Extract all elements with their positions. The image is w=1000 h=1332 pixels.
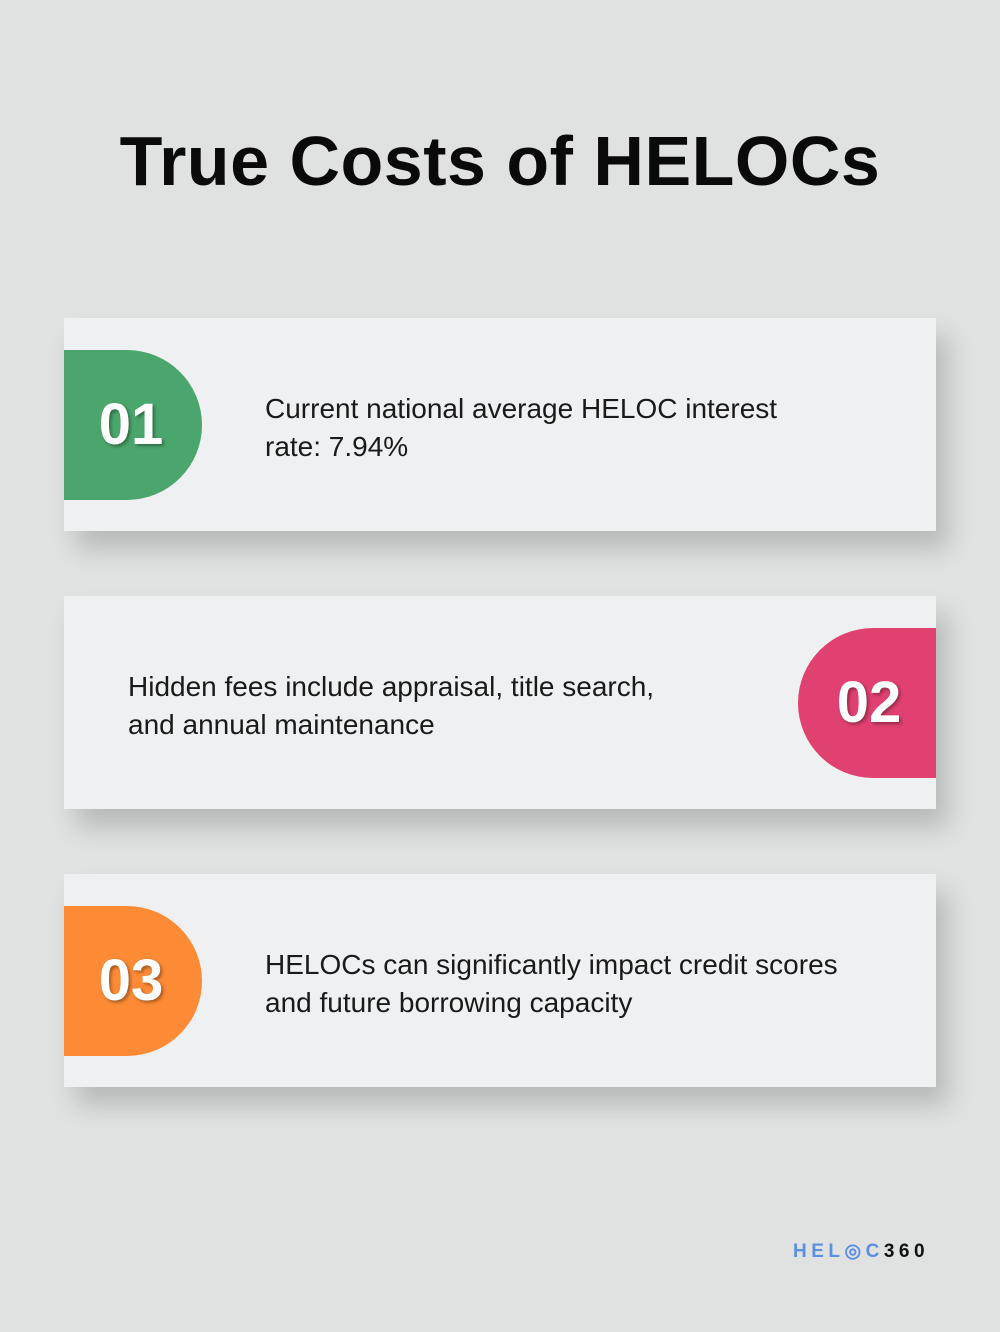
text 01: Current national average HELOC interest rate: 7.94% <box>265 393 777 462</box>
badge 01: 01 <box>99 392 163 457</box>
panel: card 03 <box>64 874 936 1087</box>
text 03: HELOCs can significantly impact credit scores and future borrowing capacity <box>265 949 838 1018</box>
badge 03 <box>64 906 202 1056</box>
panel: card 02 <box>64 596 936 809</box>
badge 03: 03 <box>99 948 163 1013</box>
logo: HEL◎C360 <box>793 1241 929 1262</box>
badge 02: 02 <box>837 670 901 735</box>
badge 01 <box>64 350 202 500</box>
text 02: Hidden fees include appraisal, title search, and annual maintenance <box>128 671 654 740</box>
title: True Costs of HELOCs <box>120 122 880 200</box>
badge 02 <box>798 628 936 778</box>
panel: card 01 <box>64 318 936 531</box>
